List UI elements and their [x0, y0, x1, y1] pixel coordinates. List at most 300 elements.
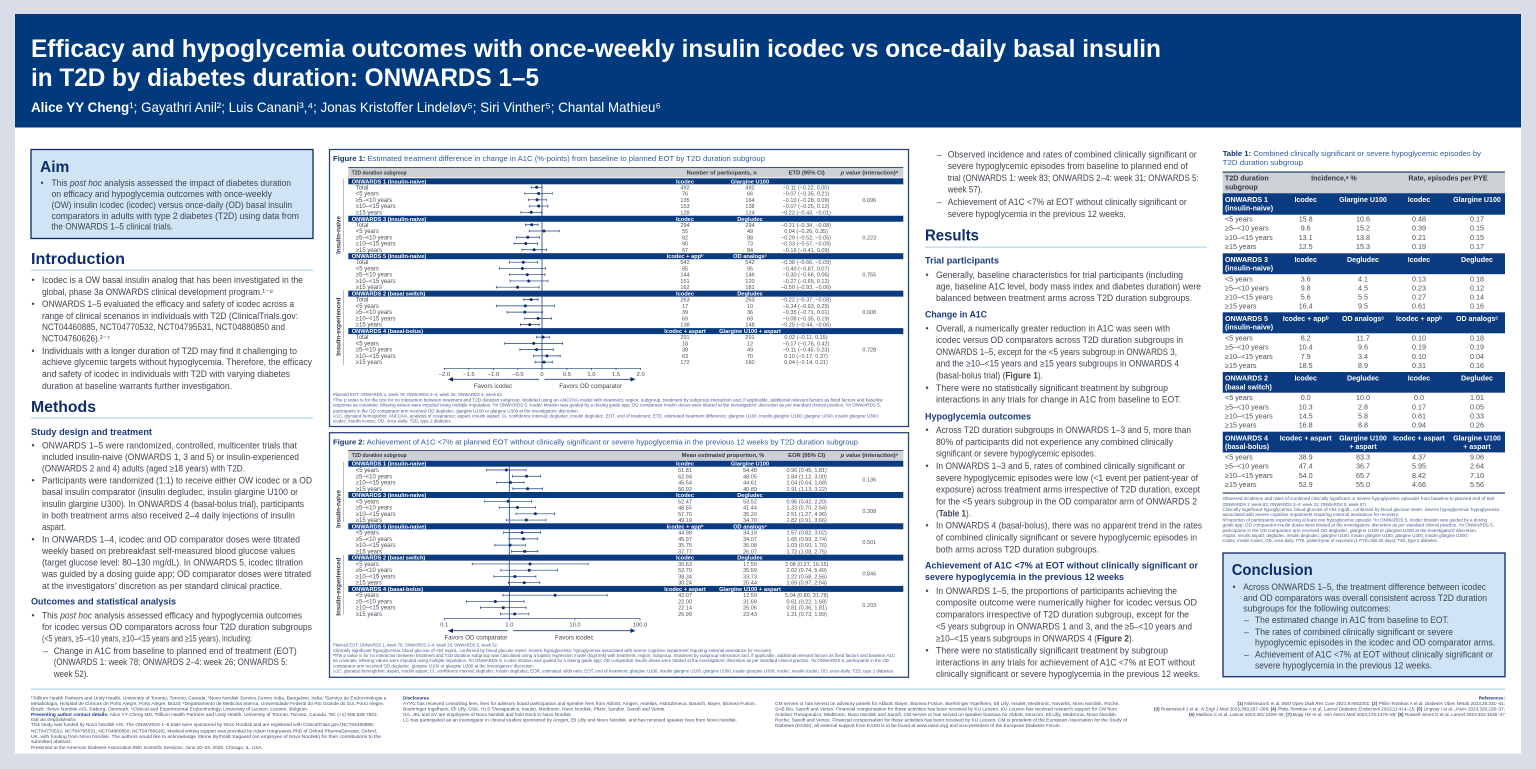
subheading: study design: Study design and treatment [31, 427, 152, 437]
introduction text: range of clinical scenarios in individuals with T2D (ClinicalTrials.gov: [42, 311, 298, 321]
change in A1C text: There were no statistically significant treatment by subgroup [936, 383, 1168, 393]
ONWARDS 2 block: 0.17 [1412, 402, 1426, 411]
affiliations and contact: ¹Trillium Health Partners and Unity Health, University of Toronto, Toronto, Canada; ²Novo Nordisk Service Centre India, Bangalore, India; ³Serviço de Endocrinologia e [31, 696, 387, 700]
ONWARDS 4 block: <5 years [1225, 453, 1253, 462]
ONWARDS 5 block: 0.16 [1470, 361, 1484, 370]
ONWARDS 5 rows: 1.57 (0.82, 3.02) [787, 531, 827, 537]
subheading: change in A1C: Change in A1C [925, 310, 987, 320]
ONWARDS 3 rows: 84 [747, 248, 753, 254]
ONWARDS 5 block: 8.2 [1301, 334, 1311, 343]
ONWARDS 3 rows: 88 [747, 235, 753, 241]
figure 1 footnotes: ᵃThe p value is for the test for no interaction between treatment and T2D duration subgroup. Modeled using an ANCOVA model with treatment, region, subgroup, treatment by subgroup interaction and, if applicable, additional relevant factors as fixed factors and baseline [333, 397, 884, 402]
ONWARDS 4 block: 8.42 [1412, 471, 1426, 480]
figure 1 footnotes: icodec, insulin icodec; OD, once-daily; T2D, type 2 diabetes. [333, 419, 452, 424]
figure 2 table header: p value (interaction)ᵃ [840, 453, 899, 459]
disclosures continued [775, 701, 1128, 728]
disclosures continued: CM serves or has served on advisory panels for Abbott, Bayer, Biomea Fusion, Boehringer Ingelheim, Eli Lilly, Insulet, Medtronic, Novartis, Novo Nordisk, Roche, [775, 701, 1120, 706]
ONWARDS 2 block: 0.0 [1414, 393, 1424, 402]
ONWARDS 3 rows: 294 [680, 223, 690, 229]
ONWARDS 4 block: 4.66 [1412, 480, 1426, 489]
ONWARDS 3 block: Icodec [1408, 256, 1430, 264]
panel: figure 1 [330, 150, 908, 426]
change in A1C text: Overall, a numerically greater reduction in A1C was seen with [936, 324, 1170, 334]
ONWARDS 5 block [1223, 312, 1505, 370]
panel: conclusion [1223, 553, 1505, 677]
ONWARDS 5 block: ≥10–<15 years [1225, 352, 1273, 361]
x axis: −2.0 [439, 372, 450, 378]
ONWARDS 5 rows: 151 [680, 279, 690, 285]
ONWARDS 3 rows: Degludec [737, 217, 763, 223]
ONWARDS 4 block: ≥15 years [1225, 480, 1257, 489]
disclosures continued: Roche, Sanofi and Vertex. Financial compensation for these activities has been received by KU Leuven. CM is president of the European Association for the Study of [775, 718, 1128, 722]
ONWARDS 5 rows: ONWARDS 5 (insulin-naive) [352, 524, 426, 530]
ONWARDS 1 block: 13.1 [1299, 233, 1313, 242]
ONWARDS 4 rows: 0.728 [862, 348, 876, 354]
introduction text: duration at baseline warrants further investigation. [42, 381, 232, 391]
subheading: achievement: severe hypoglycemia in the previous 12 weeks [925, 572, 1124, 582]
ONWARDS 5 rows: 0.501 [862, 540, 876, 546]
ONWARDS 1 rows: ONWARDS 1 (insulin-naive) [352, 179, 426, 185]
x axis: 0.5 [563, 372, 571, 378]
ONWARDS 3 block: 5.5 [1358, 293, 1368, 302]
ONWARDS 5 rows: 120 [745, 279, 755, 285]
ONWARDS 2 rows: ≥10–<15 years [356, 316, 396, 322]
ONWARDS 1 rows: −0.07 (−0.35, 0.21) [783, 192, 830, 198]
x axis: 0 [540, 372, 544, 378]
figure 2 footnotes: Planned EOT: ONWARDS 1, week 78; ONWARDS 2–4, week 26; ONWARDS 5, week 52. [333, 643, 498, 648]
methods continued text: – [937, 150, 942, 160]
ONWARDS 2 rows [348, 291, 903, 329]
affiliations and contact: UK, with funding from Novo Nordisk. The authors would like to acknowledge Stinne Byrholdt Søgaard (an employee of Novo Nordisk) for their contributions to the [31, 734, 381, 739]
ONWARDS 2 block: ≥15 years [1225, 421, 1257, 430]
hypoglycemia outcomes text: for the <5 years subgroup in the OD comparator arm of ONWARDS 2 [936, 496, 1197, 506]
ONWARDS 1 rows [348, 178, 903, 216]
ONWARDS 5 block: 0.19 [1412, 343, 1426, 352]
ONWARDS 3 rows: 41.44 [743, 506, 757, 512]
ONWARDS 5 block: ≥15 years [1225, 361, 1257, 370]
ONWARDS 1 rows: ≥5–<10 years [356, 198, 392, 204]
ONWARDS 3 block: Degludec [1347, 256, 1379, 264]
achievement text: interactions in any trials for achievement of A1C <7% at EOT without [936, 657, 1196, 667]
introduction text: NCT04460885, NCT04770532, NCT04795531, NCT04880850 and [42, 322, 285, 332]
trial participants text: Generally, baseline characteristics for trial participants (including [936, 270, 1183, 280]
ONWARDS 3 rows: ≥15 years [356, 248, 382, 254]
x axis: 1.0 [587, 372, 595, 378]
ONWARDS 5 rows: 146 [745, 273, 755, 279]
panel: figure 2 [330, 433, 908, 677]
authors: Alice YY Cheng¹; Gayathri Anil²; Luis Canani³,⁴; Jonas Kristoffer Lindeløv⁵; Siri Vinther⁵; Chantal Mathieu⁶ [31, 100, 661, 115]
ONWARDS 4 block: Icodec + aspart [1280, 434, 1332, 442]
figure 2 footnotes: Clinically significant hypoglycemia: blood glucose of <54 mg/dL, confirmed by blood glucose meter. Severe hypoglycemia: hypoglycemia associated with severe cognitive impairment requiring external assistance for recovery. [333, 648, 772, 653]
ONWARDS 3 rows: 35.20 [743, 512, 757, 518]
ONWARDS 2 rows: ONWARDS 2 (basal switch) [352, 556, 425, 562]
ONWARDS 3 rows: 73 [747, 242, 753, 248]
ONWARDS 4 rows: 291 [745, 335, 755, 341]
outcomes text: This post hoc analysis assessed efficacy and hypoglycemia outcomes [42, 611, 303, 621]
ONWARDS 1 rows: 45.54 [678, 480, 692, 486]
x axis [439, 368, 645, 378]
ONWARDS 1 block: Icodec [1294, 196, 1317, 204]
ONWARDS 5 rows: −0.40 (−0.87, 0.07) [783, 266, 830, 272]
ONWARDS 4 block: 7.10 [1470, 471, 1484, 480]
ONWARDS 3 block: (insulin-naive) [1225, 265, 1274, 273]
ONWARDS 2 rows: 0.608 [862, 310, 876, 316]
ONWARDS 4 rows [348, 586, 903, 618]
section: results [925, 228, 1207, 679]
ONWARDS 3 rows: 52.47 [678, 499, 692, 505]
ONWARDS 4 rows: 0.02 (−0.11, 0.15) [784, 335, 828, 341]
ONWARDS 4 rows: 172 [680, 360, 690, 366]
ONWARDS 4 rows: 70 [747, 354, 753, 360]
ONWARDS 5 block: 0.31 [1412, 361, 1426, 370]
ONWARDS 4 rows [348, 328, 903, 366]
title [31, 36, 1161, 92]
ONWARDS 1 block: ≥10–<15 years [1225, 233, 1273, 242]
study design text: aspart. [42, 522, 66, 532]
ONWARDS 2 rows: 20.44 [743, 581, 757, 587]
heading: results: Results [925, 228, 979, 245]
ONWARDS 3 block: ONWARDS 3 [1225, 256, 1268, 264]
ONWARDS 1 rows: 0.136 [862, 478, 876, 484]
ONWARDS 5 block: 11.7 [1356, 334, 1370, 343]
ONWARDS 4 rows: 0.04 (−0.14, 0.21) [784, 360, 828, 366]
ONWARDS 5 rows: 37.77 [678, 549, 692, 555]
ONWARDS 5 block: 0.04 [1470, 352, 1484, 361]
ONWARDS 4 block: (basal-bolus) [1225, 443, 1270, 451]
ONWARDS 5 block: 8.9 [1358, 361, 1368, 370]
favors arrows: Favors OD comparator [445, 634, 507, 642]
ONWARDS 3 block: 0.13 [1412, 274, 1426, 283]
ONWARDS 4 rows: 12 [747, 341, 753, 347]
ONWARDS 5 rows: ≥5–<10 years [356, 537, 392, 543]
ONWARDS 3 rows: 82 [682, 235, 688, 241]
section: introduction [31, 251, 313, 391]
disclosures continued: SAB Bio, Sanofi and Vertex. Financial compensation for these activities has been received by KU Leuven. KU Leuven has received research support for CM from [775, 706, 1117, 712]
ONWARDS 5 rows: OD analogsᶜ [733, 254, 768, 260]
side labels: Insulin-experienced [335, 297, 342, 356]
ONWARDS 1 rows: 1.91 (1.13, 3.22) [787, 487, 827, 493]
disclosures: Boehringer Ingelheim, Eli Lilly, GSK, HLS Therapeutics, Insulet, Medtronic, Novo Nordisk, Pfizer, Sandoz, Sanofi and Ventis. [403, 706, 666, 712]
ONWARDS 4 block: 54.0 [1299, 471, 1313, 480]
ONWARDS 4 block: 5.95 [1412, 462, 1426, 471]
figure 2 footnotes: comparator arm received OD degludec, glargine U100 or glargine U300 at the investigators’ discretion. [333, 663, 534, 668]
ONWARDS 1 rows: 492 [745, 185, 755, 191]
ONWARDS 1 rows: <5 years [356, 468, 379, 474]
study design text: Participants were randomized (1:1) to receive either OW icodec or a OD [42, 476, 312, 486]
ONWARDS 2 rows: 138 [680, 323, 690, 329]
ONWARDS 5 block: OD analogsᶜ [1342, 315, 1384, 323]
ONWARDS 5 rows: 162 [680, 285, 690, 291]
disclosures continued: Diabetes (EASD); all external support from EASD is to be found at www.easd.org) and vice-president of the European Diabetes Forum. [775, 723, 1061, 728]
aim text: (OW) insulin icodec (icodec) versus once-daily (OD) basal insulin [52, 200, 292, 210]
study design text: in both treatment arms also received 2–4 daily injections of insulin [42, 511, 295, 521]
ONWARDS 3 rows: ≥10–<15 years [356, 242, 396, 248]
x axis: 10.0 [569, 622, 581, 628]
affiliations and contact: Presenting author contact details: Alice YY Cheng MD, Trillium Health Partners and Unity Health, University of Toronto, Toronto, Canada. Tel: (+1) 905 828 7622. [31, 712, 378, 717]
ONWARDS 5 rows: ≥10–<15 years [356, 279, 396, 285]
ONWARDS 3 rows: ≥15 years [356, 518, 382, 524]
hypoglycemia outcomes text: In ONWARDS 4 (basal-bolus), there was no apparent trend in the rates [936, 521, 1203, 531]
ONWARDS 5 block: ONWARDS 5 [1225, 315, 1268, 323]
ONWARDS 1 block: ≥15 years [1225, 242, 1257, 251]
ONWARDS 2 rows: 148 [745, 323, 755, 329]
table 1 title: T2D duration subgroup [1223, 158, 1303, 167]
ONWARDS 5 block: 9.6 [1358, 343, 1368, 352]
ONWARDS 1 block: 15.3 [1356, 242, 1370, 251]
conclusion text: The estimated change in A1C from baseline to EOT. [1255, 615, 1449, 625]
ONWARDS 5 rows: 1.72 (1.08, 2.75) [787, 549, 827, 555]
study design text: at the investigators’ discretion as per standard clinical practice. [42, 581, 282, 591]
ONWARDS 4 block: 52.9 [1299, 480, 1313, 489]
ONWARDS 2 block: 0.0 [1301, 393, 1311, 402]
ONWARDS 2 rows: Icodec [676, 556, 694, 562]
outcomes text: – [43, 646, 48, 656]
ONWARDS 5 block: (insulin-naive) [1225, 324, 1274, 332]
ONWARDS 1 rows: Icodec [676, 462, 694, 468]
ONWARDS 2 rows: 69 [682, 316, 688, 322]
ONWARDS 2 block: 10.3 [1299, 402, 1313, 411]
ONWARDS 4 block: 36.7 [1356, 462, 1370, 471]
hypoglycemia outcomes text: significant or severe hypoglycemic episodes. [936, 449, 1096, 459]
ONWARDS 1 rows: 44.61 [743, 480, 757, 486]
ONWARDS 4 rows: 291 [680, 335, 690, 341]
outcomes text: Change in A1C from baseline to planned end of treatment (EOT) [54, 646, 297, 656]
ONWARDS 4 rows: 0.81 (0.36, 1.81) [787, 606, 827, 612]
figure 1 table header: T2D duration subgroup [352, 170, 407, 176]
conclusion text: – [1244, 649, 1249, 659]
ONWARDS 3 block: Degludec [1461, 256, 1493, 264]
ONWARDS 5 rows: 85 [682, 266, 688, 272]
achievement text: clinically significant or severe hypoglycemia in the previous 12 weeks. [936, 669, 1200, 679]
ONWARDS 1 rows: 128 [680, 210, 690, 216]
introduction text: Icodec is a OW basal insulin analog that has been investigated in the [42, 275, 303, 285]
ONWARDS 5 rows: <5 years [356, 531, 379, 537]
ONWARDS 1 rows: −0.11 (−0.22, 0.00) [783, 185, 829, 191]
ONWARDS 3 rows: ONWARDS 3 (insulin-naive) [352, 493, 426, 499]
ONWARDS 3 block: 0.12 [1470, 283, 1484, 292]
table header: subgroup [1225, 183, 1258, 191]
ONWARDS 1 rows: 164 [745, 198, 755, 204]
x axis [440, 619, 647, 628]
introduction text: ONWARDS 1–5 evaluated the efficacy and safety of icodec across a [42, 299, 294, 309]
ONWARDS 2 rows: 10 [747, 304, 753, 310]
hypoglycemia outcomes text: In ONWARDS 1–3 and 5, rates of combined clinically significant or [936, 461, 1185, 471]
ONWARDS 4 rows: 31.69 [743, 599, 757, 605]
ONWARDS 1 block: 0.48 [1412, 215, 1426, 224]
ONWARDS 2 rows: −0.35 (−0.71, 0.01) [783, 310, 830, 316]
conclusion text: • [1232, 582, 1236, 592]
study design text: basal insulin comparator (insulin degludec, insulin glargine U100 or [42, 487, 298, 497]
ONWARDS 4 block: 65.7 [1356, 471, 1370, 480]
ONWARDS 1 block: 0.21 [1412, 233, 1426, 242]
change in A1C text: icodec versus OD comparators across T2D duration subgroups in [936, 335, 1183, 345]
ONWARDS 5 rows: 542 [680, 260, 690, 266]
ONWARDS 1 rows: 51.81 [678, 468, 692, 474]
ONWARDS 3 rows: 0.308 [862, 509, 876, 515]
ONWARDS 3 block: 0.18 [1470, 274, 1484, 283]
ONWARDS 1 block: 12.5 [1299, 242, 1313, 251]
ONWARDS 2 rows: 0.846 [862, 572, 876, 578]
ONWARDS 3 rows: 2.51 (1.27, 4.96) [787, 512, 827, 518]
ONWARDS 3 rows: 0.04 (−0.26, 0.35) [784, 229, 828, 235]
ONWARDS 4 block: + aspart [1349, 443, 1377, 451]
ONWARDS 3 block: 0.14 [1470, 293, 1484, 302]
ONWARDS 2 rows: 2.02 (0.74, 5.49) [787, 568, 827, 574]
ONWARDS 5 rows: ≥15 years [356, 549, 382, 555]
table footnotes: associated with severe cognitive impairment requiring external assistance for recovery. [1222, 512, 1399, 517]
figure 2 footnotes: ᵃThe p value is for no interaction between treatment and T2D duration subgroup was calculated using a logistic regression model (logit link) with treatment, region, subgroup, treatment by subgroup interaction and, if applicable, additional relevant factors as fixed factors and baseline A1C [333, 653, 896, 658]
figure 2 table header: Mean estimated proportion, % [682, 453, 764, 459]
ONWARDS 3 block: 0.23 [1412, 283, 1426, 292]
ONWARDS 1 block: 0.39 [1412, 224, 1426, 233]
ONWARDS 4 block: Glargine U100 [1453, 434, 1501, 442]
conclusion text: The rates of combined clinically significant or severe [1255, 627, 1453, 637]
ONWARDS 4 rows: ≥5–<10 years [356, 599, 392, 605]
ONWARDS 2 block: 0.26 [1470, 421, 1484, 430]
ONWARDS 4 rows: 18 [682, 341, 688, 347]
side labels: Insulin-naive [335, 216, 342, 254]
introduction text: Individuals with a longer duration of T2D may find it challenging to [42, 346, 297, 356]
side labels: Insulin-experienced [335, 557, 342, 616]
affiliations and contact: Presented at the American Diabetes Association 85th Scientific Sessions, June 20–23, 2025, Chicago, IL, USA. [31, 745, 263, 750]
introduction text: global, phase 3a ONWARDS clinical development program.¹⁻⁸ [42, 287, 273, 297]
ONWARDS 2 block: 1.01 [1470, 393, 1484, 402]
ONWARDS 3 rows: 34.70 [743, 518, 757, 524]
ONWARDS 1 block: 0.17 [1470, 242, 1484, 251]
table 1 title: Table 1: Combined clinically significant or severe hypoglycemic episodes by [1223, 149, 1481, 158]
affiliations and contact: NCT04770532; NCT04795531; NCT04880850; NCT04760626). Medical writing support was provided by Adam Hargreaves PhD of Oxford PharmaGenesis, Oxford, [31, 728, 377, 734]
subheading: outcomes: Outcomes and statistical analysis [31, 597, 176, 607]
heading: methods: Methods [31, 399, 96, 416]
ONWARDS 5 rows: −0.50 (−0.93, −0.06) [781, 285, 831, 291]
ONWARDS 4 rows: 49 [747, 348, 753, 354]
conclusion text: Across ONWARDS 1–5, the treatment difference between icodec [1243, 582, 1487, 592]
ONWARDS 2 block: 0.05 [1470, 402, 1484, 411]
ONWARDS 4 rows: 26.06 [743, 606, 757, 612]
ONWARDS 3 block: 16.4 [1299, 302, 1313, 311]
ONWARDS 1 block: 0.15 [1470, 224, 1484, 233]
ONWARDS 3 rows: 67 [682, 248, 688, 254]
ONWARDS 1 rows: ONWARDS 1 (insulin-naive) [352, 462, 426, 468]
study design text: was guided by a dosing guide app; OD comparator doses were titrated [41, 569, 311, 579]
figure 2 table header: T2D duration subgroup [352, 453, 407, 459]
ONWARDS 5 rows: 35.08 [743, 543, 757, 549]
study design text: insulin glargine U300). In ONWARDS 4 (basal-bolus trial), participants [42, 499, 305, 509]
figure 1 table header: p value (interaction)ᵃ [840, 170, 899, 176]
ONWARDS 2 rows: Icodec [676, 292, 694, 298]
disclosures [403, 696, 756, 722]
ONWARDS 2 block [1223, 372, 1505, 430]
ONWARDS 4 block: 9.06 [1470, 453, 1484, 462]
ONWARDS 5 rows: Total [356, 260, 368, 266]
ONWARDS 3 rows: −0.33 (−0.57, −0.09) [781, 242, 831, 248]
ONWARDS 1 rows: −0.10 (−0.28, 0.09) [783, 198, 830, 204]
ONWARDS 5 rows: Icodec + appᵇ [667, 523, 704, 530]
ONWARDS 4 rows: 5.04 (0.80, 31.78) [785, 593, 829, 599]
study design text: (target glucose level: 80–130 mg/dL). In ONWARDS 5, icodec titration [42, 558, 303, 568]
ONWARDS 2 rows: 1.22 (0.58, 2.56) [787, 574, 827, 580]
ONWARDS 2 rows: 33.73 [743, 574, 757, 580]
ONWARDS 4 rows: Icodec + aspart [664, 587, 706, 593]
ONWARDS 4 rows: 12.59 [743, 593, 757, 599]
subheading: hypoglycemia outcomes: Hypoglycemia outcomes [925, 411, 1031, 421]
ONWARDS 2 block: ONWARDS 2 [1225, 375, 1268, 383]
ONWARDS 3 rows: Icodec [676, 493, 694, 499]
achievement text: <5 years subgroup in ONWARDS 1 and 3, and the ≥5–<10 years and [936, 621, 1192, 631]
study design text: weekly based on prebreakfast self-measured blood glucose values [41, 546, 296, 556]
ONWARDS 1 rows: <5 years [356, 192, 379, 198]
methods continued text: Observed incidence and rates of combined clinically significant or [948, 150, 1197, 160]
ONWARDS 5 rows: ONWARDS 5 (insulin-naive) [352, 254, 426, 260]
ONWARDS 2 rows: 35.59 [743, 568, 757, 574]
aim text: This post hoc analysis assessed the impact of diabetes duration [52, 178, 291, 188]
hypoglycemia outcomes text: 80% of participants did not experience any combined clinically [936, 437, 1174, 447]
disclosures: AYYC has received consulting fees, fees for advisory board participation and speaker fees from Abbott, Amgen, Astellas, AstraZeneca, Bausch, Bayer, Biomea Fusion, [403, 701, 756, 706]
ONWARDS 2 rows: ≥15 years [356, 581, 382, 587]
favors arrows [448, 377, 636, 390]
table footnotes: Observed incidence and rates of combined clinically significant or severe hypoglycemic episodes from baseline to planned end of trial [1222, 496, 1494, 501]
ONWARDS 5 rows: 1.65 (0.99, 2.74) [787, 537, 827, 543]
introduction text: • [32, 299, 35, 309]
ONWARDS 4 block: ≥10–<15 years [1225, 471, 1273, 480]
study design text: included insulin-naive (ONWARDS 1, 3 and 5) or insulin-experienced [42, 452, 299, 462]
ONWARDS 3 block: ≥5–<10 years [1225, 283, 1269, 292]
change in A1C text: (basal-bolus trial) (Figure 1). [936, 370, 1043, 380]
ONWARDS 3 rows: 0.96 (0.42, 2.20) [787, 499, 827, 505]
ONWARDS 4 rows: ONWARDS 4 (basal-bolus) [352, 587, 423, 593]
change in A1C text: ONWARDS 1–5, except for the <5 years subgroup in ONWARDS 3, [936, 347, 1177, 357]
footer [31, 688, 1505, 750]
ONWARDS 3 block: 4.1 [1358, 274, 1368, 283]
ONWARDS 5 rows: Icodec + appᵇ [667, 253, 704, 260]
ONWARDS 1 rows: 138 [745, 204, 755, 210]
outcomes text: • [32, 611, 35, 621]
ONWARDS 4 rows: ≥15 years [356, 612, 382, 618]
ONWARDS 4 rows: 160 [745, 360, 755, 366]
hypoglycemia outcomes text: Across T2D duration subgroups in ONWARDS 1–3 and 5, more than [936, 425, 1191, 435]
ONWARDS 2 block: Icodec [1294, 375, 1317, 383]
ONWARDS 1 rows: 76 [682, 192, 688, 198]
figure 1 table header [348, 167, 903, 177]
introduction text: and safety of icodec in individuals with T2D with varying diabetes [42, 369, 291, 379]
x axis: −1.5 [463, 372, 475, 378]
ONWARDS 1 rows: ≥15 years [356, 210, 382, 216]
affiliations and contact: Metabologia, Hospital de Clínicas de Porto Alegre, Porto Alegre, Brazil; ⁴Departamento de Medicina Interna, Universidade Federal do Rio Grande do Sul, Porto Alegre, [31, 701, 384, 706]
figure 1 footnotes: response as covariate. Missing values were imputed using multiple imputation. ᵇIn ONWARDS 5, icodec titration was guided by a dosing guide app; OD comparator insulin doses were titrated at the investigators’ discretion as per standard clinical practice. ᶜIn ONWARDS 5, [333, 403, 881, 408]
change in A1C text [926, 324, 1183, 405]
ONWARDS 2 rows: 39 [682, 310, 688, 316]
ONWARDS 5 rows: 45.97 [678, 537, 692, 543]
ONWARDS 2 rows: ≥5–<10 years [356, 310, 392, 316]
introduction text: • [32, 275, 35, 285]
aim text [40, 178, 299, 232]
ONWARDS 4 block: + aspart [1463, 443, 1491, 451]
ONWARDS 1 block: 0.15 [1470, 233, 1484, 242]
ONWARDS 2 rows [348, 555, 903, 587]
ONWARDS 5 rows: 44.98 [678, 531, 692, 537]
ONWARDS 2 rows: <5 years [356, 562, 379, 568]
methods continued text: Achievement of A1C <7% at EOT without clinically significant or [948, 197, 1187, 207]
disclosures: Disclosures [403, 696, 429, 700]
ONWARDS 3 rows: 49 [747, 229, 753, 235]
ONWARDS 5 rows: ≥5–<10 years [356, 273, 392, 279]
ONWARDS 3 rows: ≥5–<10 years [356, 506, 392, 512]
table header: T2D duration [1225, 175, 1269, 183]
ONWARDS 4 rows: 22.14 [678, 606, 692, 612]
ONWARDS 4 rows: Total [356, 335, 368, 341]
table 1 title [1223, 149, 1481, 167]
ONWARDS 2 block: 10.0 [1356, 393, 1370, 402]
